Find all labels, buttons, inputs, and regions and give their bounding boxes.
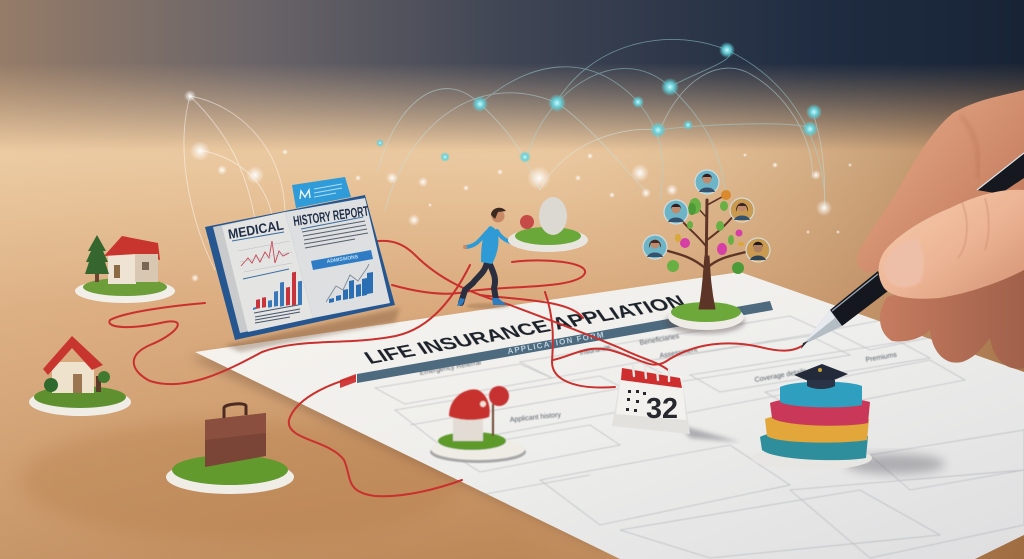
paper small blurred labels: Premiums bbox=[865, 352, 898, 364]
trend line bbox=[326, 264, 369, 302]
paper small blurred labels: Applicant history bbox=[509, 412, 562, 424]
thread end at book bbox=[358, 242, 362, 246]
stone marker on green disc bbox=[508, 197, 588, 252]
paper small blurred labels: Coverage details bbox=[754, 368, 808, 384]
paper small blurred labels bbox=[419, 333, 898, 424]
medical history report book bbox=[205, 177, 400, 352]
tree trunk and branches bbox=[668, 197, 746, 309]
form title band bbox=[340, 301, 773, 388]
calendar: 32 bbox=[646, 393, 678, 425]
form title band: APPLICATION FORM bbox=[507, 330, 605, 356]
pen upper barrel bbox=[977, 153, 1024, 194]
form title: LIFE INSURANCE APPLIATION bbox=[360, 292, 690, 368]
index finger and hand back bbox=[857, 90, 1024, 273]
report tab bbox=[292, 177, 351, 208]
runner bbox=[457, 208, 522, 309]
house on green disc, left bbox=[29, 336, 131, 416]
medical history report book: ADMISSIONS bbox=[326, 254, 359, 265]
runner legs bbox=[461, 262, 487, 303]
pen body bbox=[801, 271, 888, 349]
family tree bbox=[643, 170, 770, 334]
blue strip bbox=[311, 250, 373, 270]
text lines right bbox=[302, 221, 368, 248]
thumb bbox=[879, 190, 1024, 299]
teal nodes bbox=[376, 42, 822, 163]
paper small blurred labels: Beneficiaries bbox=[639, 333, 680, 347]
portraits bbox=[643, 170, 770, 262]
lower fingers bbox=[880, 260, 1024, 369]
calendar bbox=[612, 366, 740, 442]
paper small blurred labels: Insurance bbox=[579, 345, 611, 357]
paper small blurred labels: Emergency Referral bbox=[419, 359, 482, 377]
form paper bbox=[190, 272, 1024, 559]
book heading left: MEDICAL bbox=[227, 217, 285, 242]
paper form fields bbox=[375, 312, 1024, 558]
paper small blurred labels: Assessment bbox=[659, 346, 698, 360]
book heading right: HISTORY REPORT bbox=[292, 203, 370, 229]
writing hand bbox=[801, 90, 1024, 369]
network of glowing arcs and nodes bbox=[184, 39, 852, 282]
house on green disc, upper bbox=[75, 235, 175, 303]
mushroom house on green disc bbox=[430, 386, 526, 463]
bar chart right bbox=[329, 272, 373, 303]
leaves bbox=[667, 190, 744, 274]
book stack with graduation cap bbox=[752, 364, 945, 474]
briefcase on green disc bbox=[166, 404, 294, 494]
ecg line chart bbox=[241, 241, 289, 266]
bar chart left bbox=[253, 272, 302, 310]
tree base bbox=[665, 310, 745, 334]
white glow nodes bbox=[184, 90, 852, 282]
torso bbox=[481, 226, 498, 264]
red threads bbox=[109, 241, 802, 496]
